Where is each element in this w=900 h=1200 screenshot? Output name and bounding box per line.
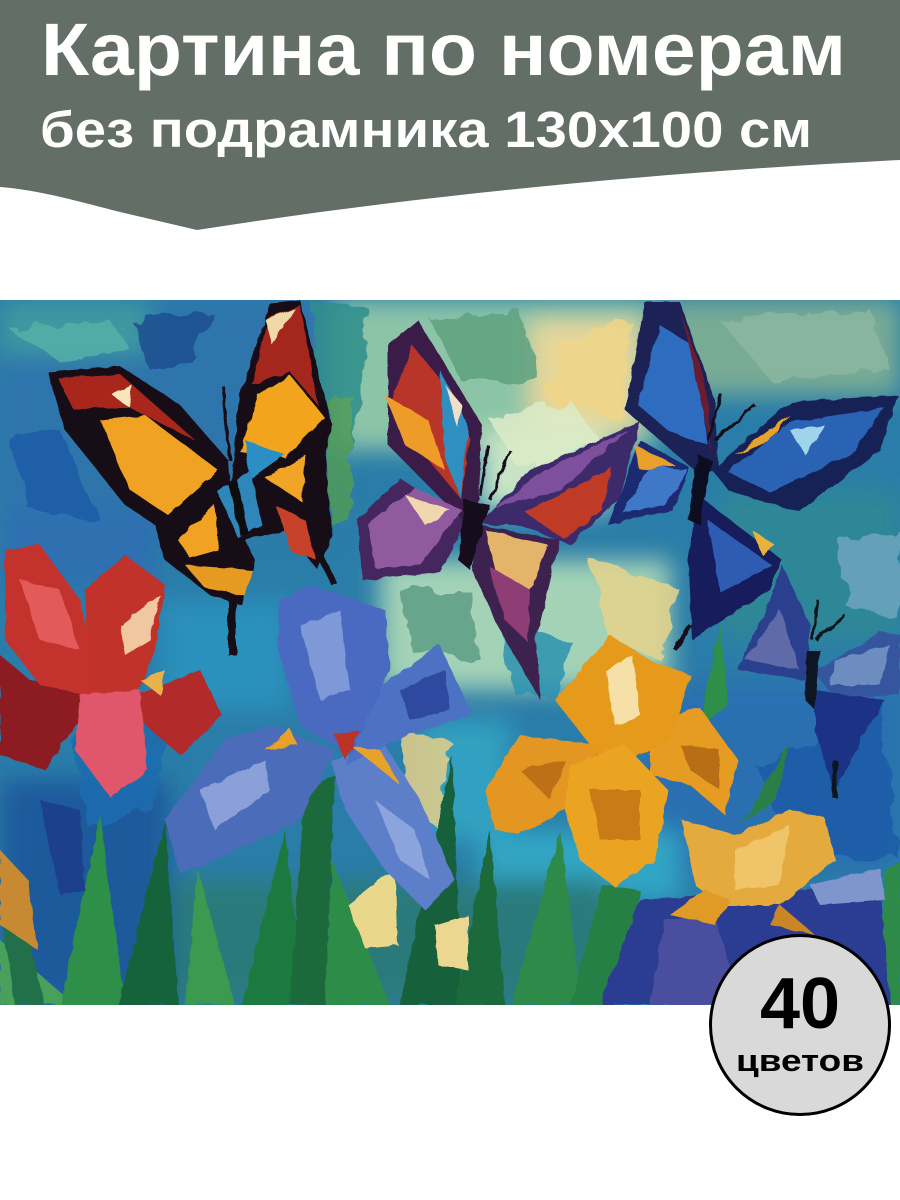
badge number: 40 bbox=[760, 964, 840, 1044]
butterfly: red and purple bbox=[358, 320, 640, 700]
title: Картина по номерам bbox=[41, 8, 846, 91]
subtitle: без подрамника 130х100 см bbox=[40, 101, 812, 158]
painting: butterflies and irises bbox=[0, 300, 900, 1005]
butterfly: small blue bbox=[738, 565, 900, 798]
painted background bbox=[0, 300, 900, 1005]
flower: yellow iris bbox=[485, 635, 738, 887]
flower: blue iris bbox=[165, 585, 472, 910]
badge label: цветов bbox=[736, 1043, 864, 1078]
butterfly: dark blue bbox=[608, 302, 898, 650]
flower: red iris bbox=[0, 545, 222, 797]
grass leaves bbox=[0, 625, 900, 1005]
badge: 40 colours bbox=[710, 936, 890, 1114]
butterfly: orange bbox=[48, 300, 335, 655]
flower: small yellow iris bbox=[600, 810, 890, 1005]
header banner bbox=[0, 0, 900, 230]
